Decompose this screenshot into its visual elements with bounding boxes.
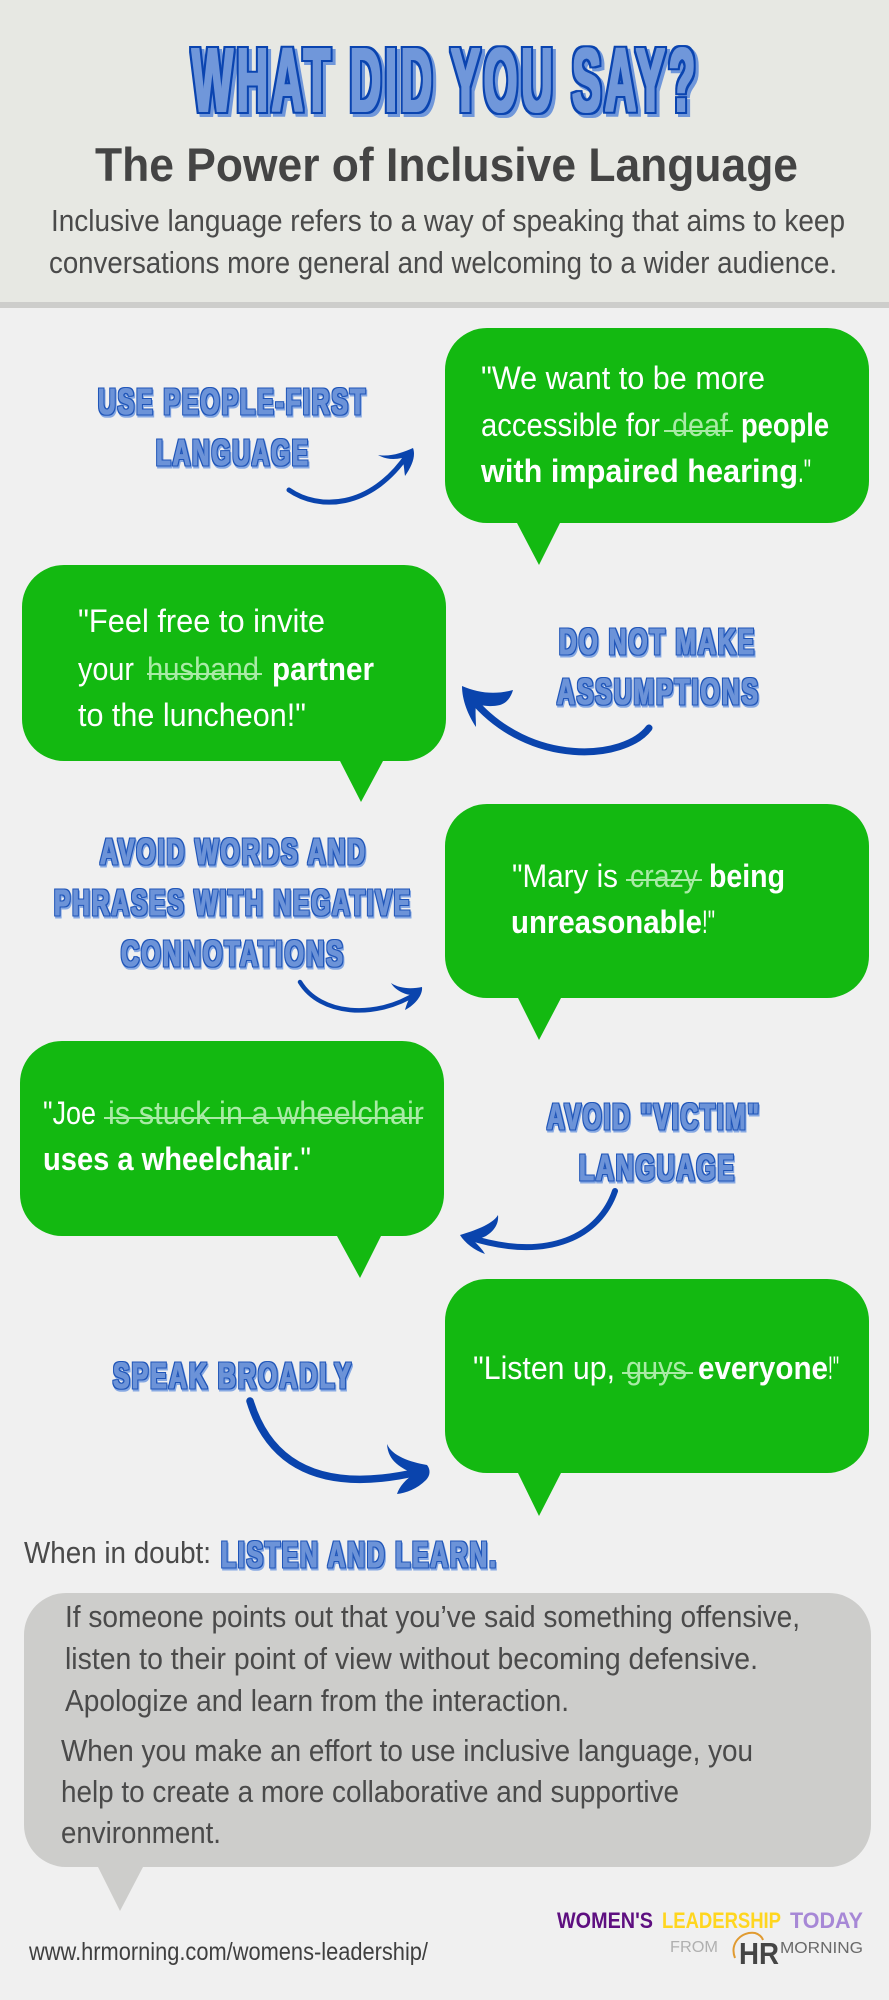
speech bubble 1: [445, 328, 869, 565]
speech bubble 4: uses a wheelchair: [43, 1141, 292, 1177]
panel: header: [0, 0, 889, 308]
logo: women's leadership today from hr morning: MORNING: [780, 1940, 863, 1957]
heading: avoid words and phrases with negative connotations: [54, 831, 412, 974]
panel: grey speech bubble with advice: [24, 1593, 871, 1911]
speech bubble 3: [445, 804, 869, 1040]
heading: do not make assumptions: [557, 621, 760, 712]
speech bubble 2: your: [78, 651, 134, 687]
speech bubble 3: unreasonable: [511, 904, 702, 940]
arrow: victim to bubble: [460, 1191, 615, 1254]
speech bubble 1: with impaired hearing: [480, 453, 798, 489]
heading: when in doubt: When in doubt:: [24, 1535, 211, 1570]
heading: do not make assumptions: ASSUMPTIONS: [557, 671, 760, 712]
heading: avoid victim language: [547, 1096, 761, 1188]
logo: women's leadership today from hr morning: HR: [739, 1936, 779, 1971]
speech bubble 3: being: [709, 858, 785, 894]
speech bubble 1: people: [741, 407, 829, 443]
speech bubble 5: guys: [626, 1350, 687, 1386]
speech bubble 1: deaf: [672, 407, 728, 443]
arrow: speak broadly to bubble: [250, 1401, 430, 1494]
speech bubble 3: crazy: [630, 858, 698, 894]
heading: avoid words and phrases with negative connotations: CONNOTATIONS: [121, 933, 345, 974]
speech bubble 4: "Joe: [43, 1095, 96, 1131]
heading: avoid victim language: AVOID "VICTIM": [547, 1096, 761, 1137]
heading: use people-first language: USE PEOPLE-FIRST: [98, 381, 367, 422]
logo: women's leadership today from hr morning: LEADERSHIP: [662, 1908, 781, 1933]
arrow: assumptions to bubble: [462, 686, 649, 752]
speech bubble 3: !": [702, 904, 715, 940]
panel: grey speech bubble with advice: When you make an effort to use inclusive language, you: [61, 1733, 753, 1768]
speech bubble 2: partner: [272, 651, 374, 687]
speech bubble 5: [445, 1279, 869, 1516]
speech bubble 2: husband: [147, 651, 259, 687]
heading: avoid victim language: LANGUAGE: [579, 1147, 736, 1188]
speech bubble 3: "Mary is: [512, 858, 618, 894]
speech bubble 4: is stuck in a wheelchair: [108, 1095, 424, 1131]
speech bubble 5: "Listen up,: [473, 1350, 615, 1386]
speech bubble 4: [20, 1041, 444, 1278]
panel: grey speech bubble with advice: help to create a more collaborative and supportive: [61, 1774, 679, 1809]
speech bubble 1: accessible for: [481, 407, 660, 443]
arrow: people-first to bubble: [289, 448, 414, 502]
speech bubble 1: .": [798, 453, 811, 489]
speech bubble 4: .": [292, 1141, 311, 1177]
speech bubble 2: "Feel free to invite: [78, 603, 325, 639]
speech bubble 5: !": [828, 1350, 839, 1386]
heading: use people-first language: LANGUAGE: [156, 432, 310, 473]
subtitle: The Power of Inclusive Language: [95, 138, 798, 191]
panel: grey speech bubble with advice: Apologize and learn from the interaction.: [65, 1683, 569, 1718]
panel: grey speech bubble with advice: If someone points out that you’ve said something offensive,: [65, 1599, 800, 1634]
heading: use people-first language: [98, 381, 367, 473]
heading: when in doubt: LISTEN AND LEARN.: [221, 1534, 498, 1575]
logo: women's leadership today from hr morning: FROM: [670, 1939, 718, 1956]
heading: speak broadly: SPEAK BROADLY: [113, 1355, 353, 1396]
heading: avoid words and phrases with negative connotations: PHRASES WITH NEGATIVE: [54, 882, 412, 923]
speech bubble 5: everyone: [698, 1350, 828, 1386]
logo: women's leadership today from hr morning: TODAY: [790, 1908, 863, 1933]
logo: women's leadership today from hr morning: WOMEN'S: [557, 1908, 653, 1933]
speech bubble 2: [22, 565, 446, 802]
speech bubble 1: "We want to be more: [481, 360, 765, 396]
panel: grey speech bubble with advice: environment.: [61, 1815, 221, 1850]
website url: www.hrmorning.com/womens-leadership/: [28, 1938, 428, 1966]
intro text: [49, 203, 845, 280]
logo: women's leadership today from hr morning: [557, 1908, 863, 1971]
arrow: connotations to bubble: [300, 982, 422, 1010]
heading: when in doubt: [24, 1534, 498, 1575]
speech bubble 2: to the luncheon!": [78, 697, 306, 733]
heading: do not make assumptions: DO NOT MAKE: [559, 621, 756, 662]
heading: avoid words and phrases with negative connotations: AVOID WORDS AND: [100, 831, 367, 872]
panel: grey speech bubble with advice: listen to their point of view without becoming defensive.: [65, 1641, 758, 1676]
